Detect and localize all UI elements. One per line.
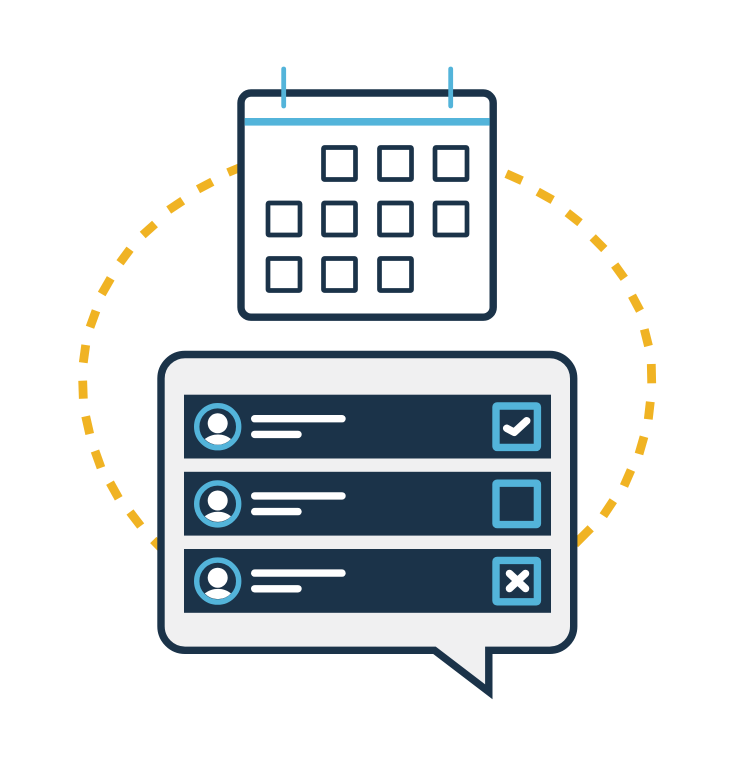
list row 3: rejected — [184, 549, 551, 613]
icon: user avatar — [197, 483, 239, 525]
icon: empty box — [496, 483, 537, 525]
list row 2: unchecked — [184, 472, 551, 536]
row background — [184, 472, 551, 536]
dashed yellow circle — [83, 168, 652, 552]
name placeholder lines — [255, 573, 342, 589]
calendar body — [241, 93, 493, 317]
calendar — [241, 69, 493, 317]
calendar day squares — [268, 148, 467, 290]
icon: user avatar — [197, 406, 239, 448]
row background — [184, 549, 551, 613]
icon: user avatar — [197, 560, 239, 602]
calendar binding pegs — [284, 69, 451, 106]
icon: checked box — [496, 406, 537, 447]
name placeholder lines — [255, 419, 342, 434]
speech bubble panel — [161, 354, 574, 692]
list row 1: checked — [184, 395, 551, 458]
name placeholder lines — [255, 496, 342, 512]
calendar header bar — [245, 118, 490, 126]
row background — [184, 395, 551, 458]
icon: crossed box — [496, 560, 537, 602]
